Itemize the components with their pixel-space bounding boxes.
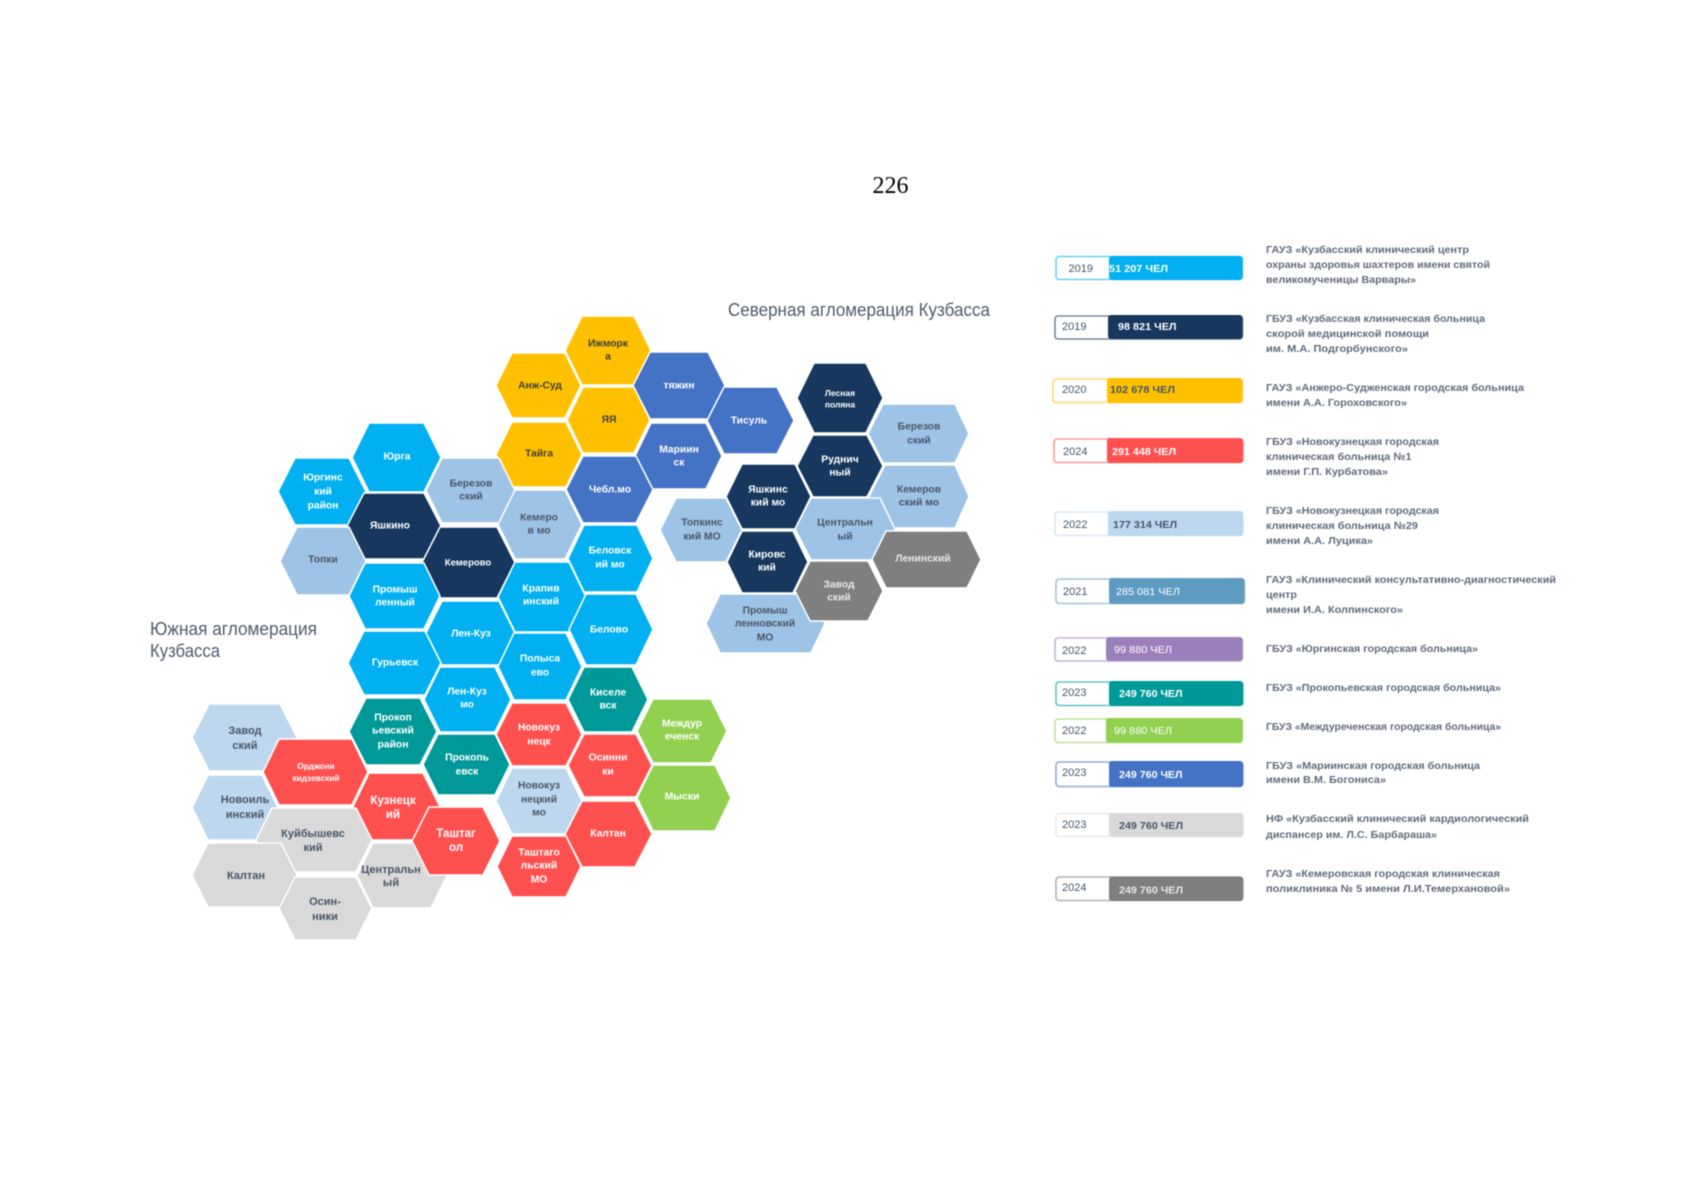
hex: Промышленный (349, 563, 440, 629)
heading: south agglomeration (150, 619, 317, 661)
row 4: Курбатов: клиническая больница №1 (1266, 451, 1412, 463)
hex: Березовский, north: Березов (898, 422, 940, 432)
hex: Орджоникидзевский: Орджони (297, 761, 335, 771)
row 3: Гороховский: имени А.А. Гороховского» (1266, 397, 1407, 409)
hex: Мариинск: Мариин (659, 444, 699, 456)
row 11: Барбараш: 249 760 ЧЕЛ (1119, 820, 1183, 832)
hex: Центральный, south: ый (383, 877, 399, 889)
hex: Полысаево (498, 633, 582, 700)
hex: Кузнецкий: ий (386, 809, 400, 821)
row 11: Барбараш: НФ «Кузбасский клинический кардиологический (1266, 813, 1529, 825)
row 7: Юрга hospital: ГБУЗ «Юргинская городская больница» (1266, 643, 1478, 655)
hex: Тисуль (707, 387, 794, 454)
hex: Белово: Белово (590, 624, 628, 636)
hex: Междуреченск: еченск (665, 732, 700, 742)
row 8: Прокопьевск hospital: ГБУЗ «Прокопьевская городская больница» (1266, 682, 1501, 694)
hex: Чебулинский МО (566, 456, 653, 523)
hex: Центральный, north: Центральн (817, 518, 873, 528)
hex: Ижморка (565, 316, 651, 385)
hex: Лесная поляна: поляна (825, 400, 855, 410)
hex: Заводский, north: Завод (823, 580, 855, 590)
row 7: Юрга hospital: 2022 (1062, 645, 1086, 657)
row 6: Колпинский (1056, 574, 1556, 616)
row 3: Гороховский: ГАУЗ «Анжеро-Судженская городская больница (1266, 382, 1524, 394)
hex: Заводский, north: ский (827, 592, 851, 604)
row 10: Богонис: 2023 (1062, 767, 1086, 779)
hex: Ленинск-Кузнецкий МО (424, 667, 511, 732)
hex: Тяжин: тяжин (664, 380, 694, 392)
hex: Тайга: Тайга (525, 448, 553, 460)
hex: Яшкинский МО: кий мо (751, 498, 785, 508)
heading: south agglomeration: Южная агломерация (150, 619, 317, 639)
row 1: Варвары: ГАУЗ «Кузбасский клинический центр (1266, 244, 1469, 256)
hex: Новоильинский: Новоиль (221, 794, 269, 806)
hex: Рудничный: Руднич (821, 454, 859, 466)
row 7: Юрга hospital (1055, 637, 1478, 661)
hex: Куйбышевский: Куйбышевс (281, 828, 345, 840)
row 8: Прокопьевск hospital: 249 760 ЧЕЛ (1119, 688, 1182, 700)
row 4: Курбатов: 2024 (1063, 446, 1087, 458)
hex: Тяжин (633, 352, 725, 419)
row 9: Междуреченск hospital: ГБУЗ «Междуреченская городская больница» (1266, 721, 1501, 733)
hex: Осинники, gray: ники (312, 911, 338, 923)
row 11: Барбараш: 2023 (1062, 819, 1086, 831)
hex: Прокопьевск (423, 734, 510, 795)
hex: Кемеровский МО (498, 490, 582, 559)
hex: Таштагольский МО: Таштаго (518, 848, 560, 858)
hex: Куйбышевский: кий (303, 842, 323, 854)
hex: Беловский МО: Беловск (589, 546, 632, 556)
hex: Мариинск (635, 423, 722, 489)
hex: Топкинский МО (660, 498, 742, 562)
hex: Яя (567, 387, 650, 453)
row 5: Луцик: имени А.А. Луцика» (1266, 535, 1373, 547)
hex: Орджоникидзевский: кидзевский (292, 773, 340, 783)
hex: Кировский: кий (758, 562, 776, 574)
hex: Новокузнецкий МО: мо (532, 808, 546, 818)
hex: Ленинск-Кузнецкий МО: Лен-Куз (447, 686, 487, 698)
hex map: south agglomeration and centre (192, 316, 981, 940)
hex: Орджоникидзевский (263, 739, 368, 805)
hex: Юргинский район: район (308, 500, 338, 512)
row 10: Богонис: 249 760 ЧЕЛ (1119, 769, 1182, 781)
hex: Юрга: Юрга (384, 452, 411, 462)
row 6: Колпинский: имени И.А. Колпинского» (1266, 604, 1403, 616)
hex: Новоильинский: инский (226, 809, 264, 821)
hex: Заводский, north (795, 561, 883, 621)
hex: Крапивинский: Крапив (522, 584, 560, 594)
hex: Калтан, red: Калтан (590, 828, 626, 840)
hex: Новокузнецк: Новокуз (518, 722, 560, 734)
hex: Прокопьевск: евск (456, 766, 479, 778)
hex: Анжеро-Судженск (496, 353, 581, 418)
hex: Рудничный (797, 435, 883, 497)
row 9: Междуреченск hospital: 99 880 ЧЕЛ (1114, 725, 1172, 737)
hex: Ленинск-Кузнецкий: Лен-Куз (451, 628, 491, 640)
hex: Кузнецкий (353, 773, 440, 840)
hex: Таштагольский МО: МО (531, 874, 547, 886)
hex: Топки (280, 527, 366, 595)
hex: Кузнецкий: Кузнецк (370, 795, 416, 807)
hex: Яшкинский МО (726, 464, 811, 529)
hex: Крапивинский (498, 562, 586, 632)
row 9: Междуреченск hospital (1055, 718, 1501, 743)
page number: 226 (872, 173, 908, 199)
hex: Топкинский МО: Топкинс (681, 518, 723, 528)
hex: Березовский, north: ский (907, 436, 931, 446)
hex: Калтан, gray (192, 843, 297, 907)
hex: Кемеровский МО, north: Кемеров (897, 484, 941, 496)
hex: Междуреченск: Междур (662, 718, 702, 730)
row 10: Богонис: имени В.М. Богониса» (1266, 774, 1386, 786)
hex: Березовский (426, 458, 515, 523)
row 5: Луцик: 177 314 ЧЕЛ (1113, 519, 1177, 531)
hex: Заводский, south (192, 704, 297, 771)
hex: Березовский, north (868, 404, 969, 463)
hex: Куйбышевский (256, 808, 372, 872)
hex: Кемеровский МО, north: ский мо (899, 498, 939, 508)
hex: Новокузнецк: нецк (527, 736, 552, 748)
row 10: Богонис: ГБУЗ «Мариинская городская больница (1266, 760, 1480, 772)
hex: Новокузнецкий МО: нецкий (521, 794, 557, 806)
legend: hospitals list (1053, 244, 1556, 901)
row 12: Темерханова: ГАУЗ «Кемеровская городская клиническая (1266, 868, 1500, 880)
hex: Крапивинский: инский (523, 596, 559, 608)
hex: Центральный, north (795, 498, 895, 560)
hex: Тайга (496, 422, 582, 487)
row 5: Луцик: 2022 (1063, 519, 1087, 531)
row 12: Темерханова: 249 760 ЧЕЛ (1119, 884, 1183, 896)
hex: Юрга (352, 423, 441, 492)
hex: Промышленновский МО: ленновский (735, 618, 795, 630)
hex: Ижморка: а (605, 352, 611, 362)
hex: Осинники: Осинни (589, 752, 627, 764)
hex: Промышленный: ленный (375, 598, 415, 608)
hex: Заводский, south: Завод (228, 725, 262, 737)
hex: Ижморка: Ижморк (588, 338, 629, 350)
hex: Мариинск: ск (674, 458, 685, 468)
row 10: Богонис (1056, 760, 1480, 787)
hex: Новокузнецкий МО (496, 768, 582, 834)
hex: Осинники (568, 734, 652, 797)
hex: Топки: Топки (308, 554, 338, 566)
hex: Ленинский (872, 531, 981, 588)
hex: Промышленновский МО: Промыш (743, 606, 787, 616)
hex: Тисуль: Тисуль (731, 416, 767, 426)
hex: Таштагольский МО (497, 836, 581, 897)
hex: Яшкинский МО: Яшкинс (748, 484, 788, 496)
hex: Рудничный: ный (829, 468, 851, 478)
hex: Новоильинский (192, 775, 278, 840)
hex: Белово (569, 594, 653, 665)
hex: Ленинск-Кузнецкий (426, 601, 515, 665)
row 2: Подгорбунский: 2019 (1062, 321, 1086, 333)
row 12: Темерханова (1056, 868, 1510, 901)
hex: Чебулинский МО: Чебл.мо (589, 484, 631, 496)
hex: Мыски (637, 765, 731, 831)
row 2: Подгорбунский: ГБУЗ «Кузбасская клиническая больница (1266, 313, 1485, 325)
hex: Топкинский МО: кий МО (683, 532, 721, 542)
hex: Центральный, north: ый (837, 532, 853, 542)
hex: Новокузнецк (496, 703, 582, 766)
hex: Калтан, red (565, 801, 652, 867)
row 9: Междуреченск hospital: 2022 (1062, 725, 1086, 737)
row 2: Подгорбунский (1055, 313, 1485, 355)
hex: Калтан, gray: Калтан (227, 870, 265, 882)
row 5: Луцик: ГБУЗ «Новокузнецкая городская (1266, 505, 1439, 517)
hex: Кемеровский МО: в мо (528, 526, 550, 536)
row 11: Барбараш (1056, 813, 1529, 841)
hex: Юргинский район: Юргинс (303, 472, 343, 484)
hex: Беловский МО (568, 525, 653, 592)
hex: Междуреченск (637, 699, 727, 763)
hex: Новокузнецкий МО: Новокуз (518, 780, 560, 792)
hex: Промышленновский МО: МО (757, 632, 773, 644)
hex: Юргинский район (278, 458, 366, 525)
hex: Кировский: Кировс (748, 550, 786, 560)
row 4: Курбатов: имени Г.П. Курбатова» (1266, 466, 1388, 478)
row 2: Подгорбунский: скорой медицинской помощи (1266, 328, 1429, 340)
hex: Осинники, gray: Осин- (309, 896, 341, 908)
hex: Осинники, gray (279, 877, 372, 940)
hex: Ленинский: Ленинский (895, 554, 951, 564)
hex: Кемеровский МО: Кемеро (520, 512, 558, 524)
row 12: Темерханова: поликлиника № 5 имени Л.И.Темерхановой» (1266, 883, 1510, 895)
row 7: Юрга hospital: 99 880 ЧЕЛ (1114, 644, 1172, 656)
row 12: Темерханова: 2024 (1062, 882, 1086, 894)
hex: Заводский, south: ский (232, 740, 258, 752)
hex: Киселевск: Киселе (590, 688, 626, 698)
row 1: Варвары: 2019 (1068, 263, 1093, 275)
hex: Центральный, south (357, 843, 447, 908)
hex: Березовский: Березов (450, 478, 492, 490)
row 8: Прокопьевск hospital: 2023 (1062, 687, 1086, 699)
hex: Ленинск-Кузнецкий МО: мо (460, 700, 474, 710)
row 8: Прокопьевск hospital (1056, 681, 1501, 706)
hex: Прокопьевский район: Прокоп (374, 712, 412, 724)
hex: Прокопьевский район (349, 698, 437, 765)
hex: Центральный, south: Центральн (361, 864, 421, 876)
row 4: Курбатов (1054, 436, 1439, 478)
hex: Киселевск (568, 667, 648, 732)
row 2: Подгорбунский: им. М.А. Подгорбунского» (1266, 343, 1408, 355)
row 3: Гороховский: 102 678 ЧЕЛ (1110, 384, 1175, 396)
hex: Гурьевск (348, 631, 441, 695)
row 3: Гороховский (1053, 378, 1524, 409)
row 1: Варвары (1056, 244, 1490, 286)
heading: south agglomeration: Кузбасса (150, 641, 221, 661)
row 6: Колпинский: ГАУЗ «Клинический консультативно-диагностический (1266, 574, 1556, 586)
row 1: Варвары: 51 207 ЧЕЛ (1109, 263, 1168, 275)
heading: north agglomeration: Северная агломерация Кузбасса (728, 300, 991, 320)
hex: Мыски: Мыски (665, 792, 699, 802)
hex: Кировский (727, 531, 808, 593)
hex: Таштагол: ол (449, 842, 463, 854)
row 4: Курбатов: ГБУЗ «Новокузнецкая городская (1266, 436, 1439, 448)
hex: Яшкино: Яшкино (370, 520, 410, 532)
row 3: Гороховский: 2020 (1062, 384, 1086, 396)
hex: Лесная поляна (797, 363, 883, 433)
hex: Беловский МО: ий мо (595, 560, 625, 570)
row 6: Колпинский: центр (1266, 589, 1297, 601)
hex: Осинники: ки (602, 766, 614, 778)
hex: Киселевск: вск (600, 700, 617, 712)
row 2: Подгорбунский: 98 821 ЧЕЛ (1118, 321, 1176, 333)
hex: Анжеро-Судженск: Анж-Суд (518, 380, 562, 392)
row 11: Барбараш: диспансер им. Л.С. Барбараша» (1266, 829, 1437, 841)
row 5: Луцик: клиническая больница №29 (1266, 520, 1418, 532)
hex: Таштагольский МО: льский (521, 860, 557, 872)
row 6: Колпинский: 2021 (1063, 586, 1087, 598)
row 1: Варвары: охраны здоровья шахтеров имени святой (1266, 259, 1490, 271)
hex: Промышленный: Промыш (373, 584, 417, 596)
hex: Кемерово (422, 527, 515, 598)
hex: Промышленновский МО (706, 594, 825, 653)
row 1: Варвары: великомученицы Варвары» (1266, 274, 1416, 286)
hex: Полысаево: ево (531, 668, 549, 678)
hex: Юргинский район: кий (314, 486, 332, 498)
hex: Таштагол (412, 807, 500, 875)
row 5: Луцик (1055, 505, 1439, 547)
hex: Яя: ЯЯ (602, 414, 616, 426)
row 4: Курбатов: 291 448 ЧЕЛ (1112, 446, 1176, 458)
hex: Прокопьевск: Прокопь (445, 752, 489, 764)
hex: Прокопьевский район: район (378, 740, 408, 750)
hex: Гурьевск: Гурьевск (372, 658, 419, 668)
row 6: Колпинский: 285 081 ЧЕЛ (1116, 586, 1180, 598)
hex: Яшкино (347, 493, 441, 559)
hex: Кемерово: Кемерово (445, 558, 491, 568)
hex: Прокопьевский район: ьевский (372, 726, 414, 736)
hex: Березовский: ский (459, 492, 483, 502)
hex: Кемеровский МО, north (869, 465, 969, 528)
hex: Полысаево: Полыса (520, 654, 560, 664)
hex: Таштагол: Таштаг (436, 828, 476, 840)
hex: Лесная поляна: Лесная (825, 388, 855, 398)
